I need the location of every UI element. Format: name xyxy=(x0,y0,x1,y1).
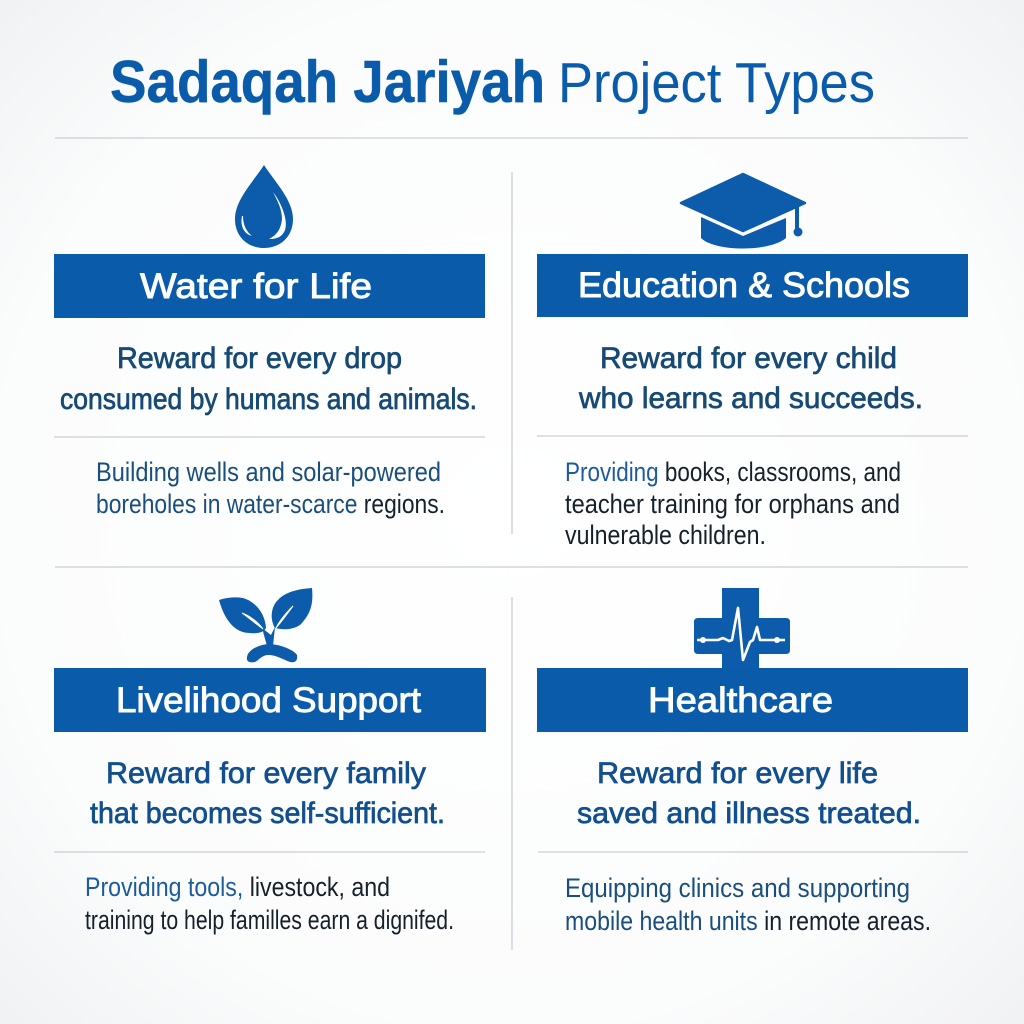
description: healthcare: mobile health units in remote areas. xyxy=(565,906,931,936)
reward text: water xyxy=(60,342,477,416)
title: Project Types xyxy=(558,51,875,115)
description: education: vulnerable children. xyxy=(565,520,766,550)
icon: sprout xyxy=(219,588,312,662)
icon: medical cross with heartbeat xyxy=(694,588,790,668)
description: livelihood: training to help familles earn a dignifed. xyxy=(85,905,454,935)
heading bar: education and schools: Education & Schools xyxy=(578,266,910,305)
description: water: Building wells and solar-powered xyxy=(96,457,441,487)
title xyxy=(110,49,875,115)
reward text: water: Reward for every drop xyxy=(117,342,402,375)
reward text: water: consumed by humans and animals. xyxy=(60,383,477,416)
heading bar: education and schools xyxy=(537,254,968,317)
description: water: boreholes in water-scarce regions. xyxy=(96,489,445,519)
heading bar: healthcare xyxy=(537,668,968,732)
description: healthcare: Equipping clinics and supporting xyxy=(565,873,910,903)
heading bar: livelihood support: Livelihood Support xyxy=(116,681,421,720)
description: water xyxy=(96,457,445,519)
panel: education and schools xyxy=(537,174,968,550)
heading bar: livelihood support xyxy=(54,668,486,732)
description: healthcare xyxy=(565,873,931,936)
panel: livelihood support xyxy=(54,588,486,935)
heading bar: water for life xyxy=(54,254,485,318)
reward text: education: who learns and succeeds. xyxy=(578,382,923,415)
heading bar: healthcare: Healthcare xyxy=(648,681,833,720)
panel: water for life xyxy=(54,165,485,519)
description: education xyxy=(565,457,901,550)
description: education: Providing books, classrooms, and xyxy=(565,457,901,487)
reward text: education xyxy=(578,342,923,415)
title: Sadaqah Jariyah xyxy=(110,49,545,115)
icon: graduation cap xyxy=(681,174,805,248)
reward text: healthcare: saved and illness treated. xyxy=(577,797,921,830)
reward text: healthcare: Reward for every life xyxy=(597,757,878,790)
reward text: education: Reward for every child xyxy=(600,342,897,375)
description: education: teacher training for orphans and xyxy=(565,489,900,519)
reward text: livelihood xyxy=(90,757,445,830)
description: livelihood: Providing tools, livestock, and xyxy=(85,872,390,902)
panel: healthcare xyxy=(537,588,968,936)
reward text: livelihood: that becomes self-sufficient. xyxy=(90,797,445,830)
heading bar: water for life: Water for Life xyxy=(140,267,372,306)
reward text: livelihood: Reward for every family xyxy=(106,757,426,790)
reward text: healthcare xyxy=(577,757,921,830)
icon: water drop xyxy=(235,165,293,248)
description: livelihood xyxy=(85,872,454,935)
